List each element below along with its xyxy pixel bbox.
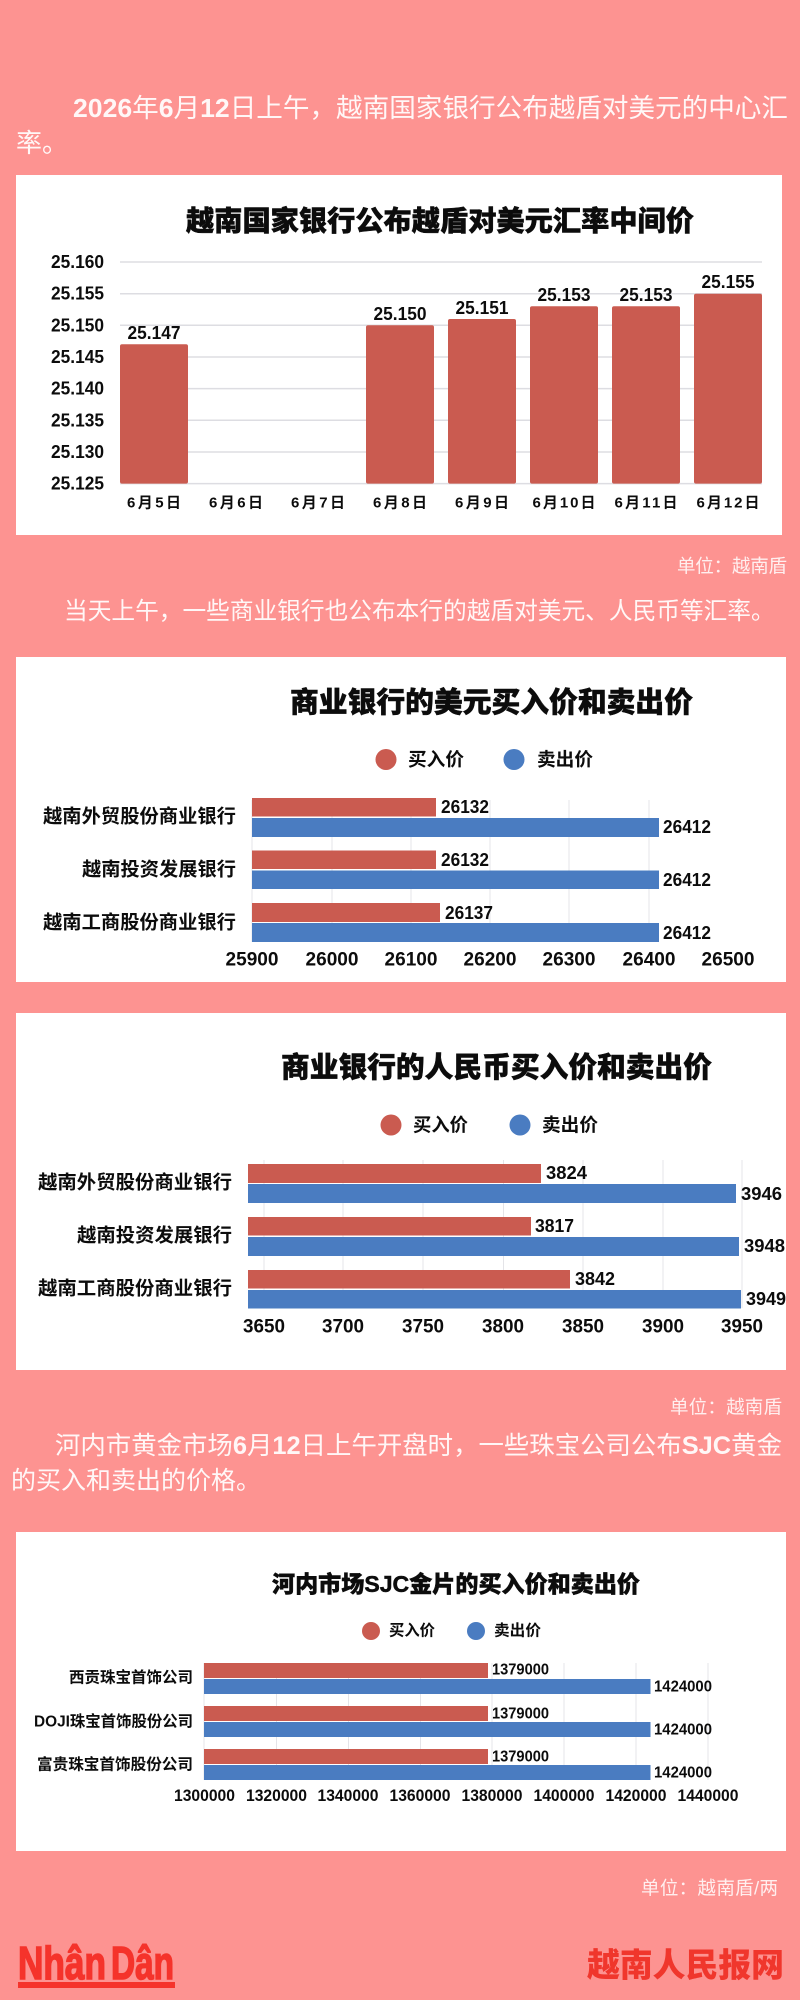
legend bbox=[376, 749, 593, 770]
bar value labels: 3824 bbox=[546, 1163, 587, 1183]
legend bbox=[362, 1622, 541, 1640]
x axis date labels: 6月9日 bbox=[455, 494, 509, 512]
x axis labels bbox=[243, 1316, 763, 1338]
bar value labels: 1379000 bbox=[492, 1748, 549, 1766]
intro text: central rate: 率。 bbox=[16, 128, 68, 158]
x axis labels: 1360000 bbox=[390, 1787, 450, 1805]
x axis date labels: 6月7日 bbox=[291, 494, 345, 512]
bar value labels: 26137 bbox=[445, 903, 493, 923]
panel: central rate bar chart bbox=[16, 175, 782, 535]
y axis labels: 25.140 bbox=[51, 379, 104, 399]
bank labels: 越南外贸股份商业银行 bbox=[38, 1172, 232, 1194]
x axis labels bbox=[226, 950, 754, 970]
chart title: 商业银行的人民币买入价和卖出价 bbox=[281, 1052, 712, 1084]
text: Hanoi gold market intro: 的买入和卖出的价格。 bbox=[11, 1467, 261, 1495]
x axis labels: 3950 bbox=[721, 1316, 763, 1338]
y axis labels: 25.160 bbox=[51, 252, 104, 272]
bar value labels: 1379000 bbox=[492, 1706, 549, 1722]
x axis labels: 26400 bbox=[622, 950, 676, 970]
x axis labels: 1300000 bbox=[174, 1787, 235, 1805]
x axis labels: 26300 bbox=[542, 950, 596, 970]
x axis labels: 1380000 bbox=[462, 1787, 522, 1805]
x axis labels: 1320000 bbox=[246, 1787, 307, 1805]
bars bbox=[204, 1663, 650, 1780]
bar value labels: 26412 bbox=[663, 923, 711, 943]
bar value labels: 1379000 bbox=[492, 1662, 549, 1678]
bar value labels: 3948 bbox=[744, 1236, 785, 1256]
text: Hanoi gold market intro: 河内市黄金市场6月12日上午开盘时，一些珠宝公司公布SJC黄金 bbox=[55, 1432, 782, 1460]
x axis labels: 26200 bbox=[464, 950, 516, 970]
company labels: DOJI珠宝首饰股份公司 bbox=[34, 1712, 193, 1730]
x axis labels: 26500 bbox=[702, 950, 754, 970]
panel: RMB buy and sell chart bbox=[16, 1013, 786, 1370]
bar value labels: 25.153 bbox=[620, 285, 672, 305]
legend: 买入价 bbox=[389, 1622, 435, 1640]
x axis date labels: 6月5日 bbox=[127, 494, 181, 512]
chart title: 商业银行的美元买入价和卖出价 bbox=[290, 686, 693, 719]
legend: 卖出价 bbox=[542, 1114, 598, 1136]
bar value labels: 25.150 bbox=[374, 304, 426, 324]
intro text: central rate: 2026年6月12日上午，越南国家银行公布越盾对美元的中心汇 bbox=[73, 93, 788, 123]
bank labels: 越南投资发展银行 bbox=[77, 1224, 232, 1246]
bank labels: 越南工商股份商业银行 bbox=[38, 1278, 232, 1300]
x axis labels: 3900 bbox=[642, 1316, 684, 1338]
logo: Nhan Dan: Nhân bbox=[18, 1937, 106, 1989]
panel: USD buy and sell chart bbox=[16, 657, 786, 982]
x axis labels: 3800 bbox=[482, 1316, 524, 1338]
x axis date labels: 6月6日 bbox=[209, 494, 263, 512]
legend: 卖出价 bbox=[494, 1622, 541, 1640]
x axis labels: 1340000 bbox=[318, 1787, 378, 1805]
logo: Vietnamese People's Daily website: 越南人民报网 bbox=[587, 1946, 784, 1984]
x axis labels: 3700 bbox=[322, 1316, 364, 1338]
bar value labels: 25.147 bbox=[128, 323, 180, 343]
y axis labels: 25.130 bbox=[51, 442, 104, 462]
x axis labels: 3750 bbox=[402, 1316, 444, 1338]
bars bbox=[120, 294, 762, 484]
x axis labels: 26100 bbox=[384, 950, 438, 970]
bars bbox=[248, 1164, 741, 1308]
text: commercial banks intro: 当天上午，一些商业银行也公布本行的越盾对美元、人民币等汇率。 bbox=[64, 598, 775, 625]
y axis labels: 25.145 bbox=[51, 347, 104, 367]
bank labels bbox=[38, 1172, 232, 1300]
bar value labels bbox=[441, 797, 711, 943]
company labels: 西贡珠宝首饰公司 bbox=[69, 1668, 193, 1686]
x axis labels: 1420000 bbox=[606, 1787, 666, 1805]
bar value labels: 26132 bbox=[441, 850, 489, 870]
chart title: 河内市场SJC金片的买入价和卖出价 bbox=[272, 1571, 640, 1597]
x axis labels: 1400000 bbox=[534, 1787, 594, 1805]
bar value labels: 1424000 bbox=[654, 1722, 712, 1738]
y axis labels: 25.155 bbox=[51, 284, 104, 304]
company labels bbox=[34, 1668, 193, 1774]
chart title: 越南国家银行公布越盾对美元汇率中间价 bbox=[186, 204, 694, 236]
x axis labels: 26000 bbox=[306, 950, 358, 970]
x axis date labels: 6月8日 bbox=[373, 494, 427, 512]
legend: 买入价 bbox=[413, 1114, 468, 1136]
bar value labels: 26412 bbox=[663, 870, 711, 890]
x axis labels: 3850 bbox=[562, 1316, 604, 1338]
unit note 1: 单位：越南盾 bbox=[677, 556, 787, 576]
bar value labels: 26132 bbox=[441, 797, 489, 817]
bars bbox=[252, 798, 659, 942]
y axis labels bbox=[51, 252, 104, 494]
bar value labels bbox=[535, 1163, 786, 1309]
bar value labels: 3949 bbox=[746, 1289, 786, 1309]
x axis labels: 3650 bbox=[243, 1316, 285, 1338]
y axis labels: 25.150 bbox=[51, 315, 104, 335]
company labels: 富贵珠宝首饰股份公司 bbox=[37, 1754, 193, 1774]
bank labels bbox=[43, 806, 236, 934]
bar value labels: 26412 bbox=[663, 817, 711, 837]
y axis labels: 25.135 bbox=[51, 410, 104, 430]
bar value labels: 3817 bbox=[535, 1216, 574, 1236]
x axis labels: 25900 bbox=[226, 950, 278, 970]
bar value labels: 25.155 bbox=[702, 272, 754, 292]
bar value labels: 1424000 bbox=[654, 1764, 712, 1782]
intro text: central rate bbox=[16, 93, 788, 158]
bank labels: 越南外贸股份商业银行 bbox=[43, 806, 236, 828]
x axis date labels: 6月12日 bbox=[696, 494, 760, 512]
bar value labels: 25.153 bbox=[538, 285, 590, 305]
text: Hanoi gold market intro bbox=[11, 1432, 782, 1495]
legend: 买入价 bbox=[408, 749, 464, 770]
x axis date labels bbox=[127, 494, 760, 512]
bar value labels bbox=[128, 272, 754, 343]
bar value labels: 25.151 bbox=[456, 298, 508, 318]
y axis labels: 25.125 bbox=[51, 474, 104, 494]
bank labels: 越南工商股份商业银行 bbox=[43, 912, 236, 934]
x axis date labels: 6月11日 bbox=[614, 494, 678, 512]
bar value labels bbox=[492, 1662, 712, 1782]
legend: 卖出价 bbox=[537, 749, 593, 770]
unit note 3: 单位：越南盾/两 bbox=[641, 1878, 778, 1898]
logo: Nhan Dan: Dân bbox=[111, 1937, 174, 1989]
bank labels: 越南投资发展银行 bbox=[82, 858, 236, 880]
unit note 2: 单位：越南盾 bbox=[670, 1396, 782, 1418]
x axis labels bbox=[174, 1787, 738, 1805]
bar value labels: 3946 bbox=[741, 1184, 782, 1204]
x axis date labels: 6月10日 bbox=[532, 494, 596, 512]
x axis labels: 1440000 bbox=[678, 1787, 738, 1805]
legend bbox=[380, 1114, 598, 1136]
bar value labels: 3842 bbox=[575, 1269, 615, 1289]
bar value labels: 1424000 bbox=[654, 1678, 712, 1696]
panel: SJC gold buy and sell chart bbox=[16, 1532, 786, 1851]
